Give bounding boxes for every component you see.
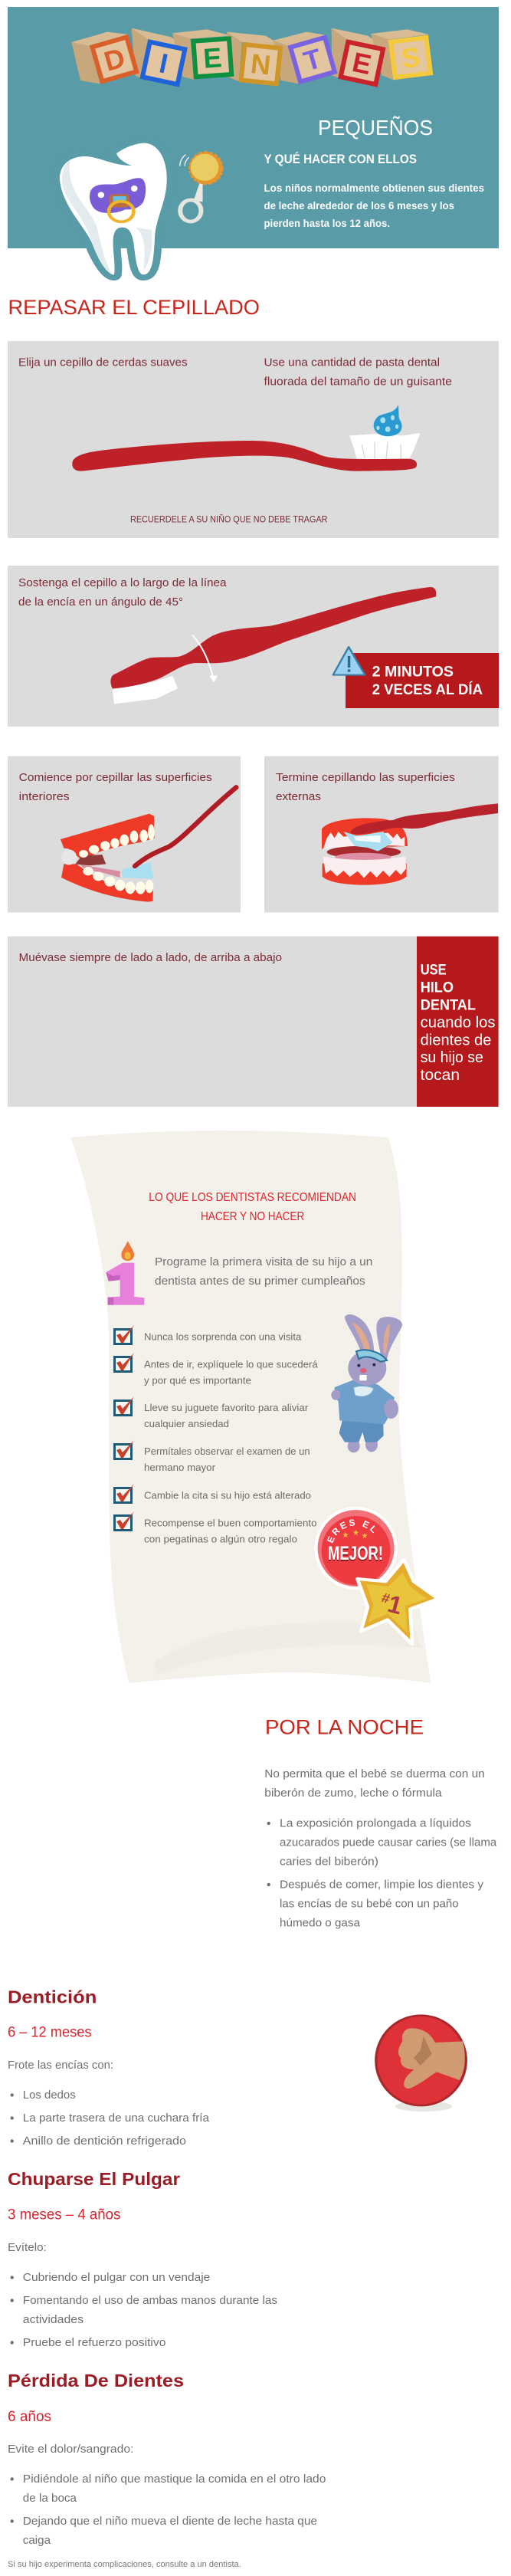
list: pulgar: Fomentando el uso de ambas manos durante las [23, 2294, 277, 2307]
text: biberon: biberón de zumo, leche o fórmula [264, 1787, 442, 1800]
badge: eres el mejor: ★ [362, 1532, 369, 1541]
title: DIENTES letter blocks [71, 28, 431, 84]
hero text: Los niños normalmente obtienen sus dientes [264, 182, 484, 194]
icon: candle number one [106, 1241, 144, 1305]
check item 5 [115, 1484, 311, 1502]
list: denticion: Los dedos [23, 2089, 76, 2102]
text: muevase: Muévase siempre de lado a lado, de arriba a abajo [18, 951, 282, 964]
callout: 2 minutos: 2 VECES AL DÍA [372, 681, 483, 698]
icon: rattle [180, 153, 222, 222]
list: noche: húmedo o gasa [280, 1916, 361, 1929]
panel: angled brush [8, 566, 499, 727]
list: noche [267, 1816, 497, 1929]
icon: tooth with pacifier [60, 143, 167, 274]
text: 45 grados [18, 576, 227, 609]
hero heading: PEQUEÑOS [318, 116, 433, 139]
panel: hero [8, 7, 499, 274]
heading: recomiendan: LO QUE LOS DENTISTAS RECOMIENDAN [149, 1191, 356, 1204]
title: DIENTES letter blocks: I [156, 47, 171, 80]
section: chuparse el pulgar [8, 2169, 277, 2349]
check item 2: Antes de ir, explíquele lo que sucederá [144, 1358, 318, 1370]
check item 3 [115, 1396, 309, 1429]
title: DIENTES letter blocks: E [202, 41, 223, 74]
section: por la noche [264, 1716, 497, 1929]
text: evite: Evite el dolor/sangrado: [8, 2443, 133, 2456]
heading: recomiendan: HACER Y NO HACER [201, 1210, 304, 1223]
list: denticion: La parte trasera de una cuchara fría [23, 2112, 210, 2125]
list: denticion [11, 2089, 210, 2148]
callout: hilo dental: su hijo se [421, 1049, 483, 1066]
list: perdida: Dejando que el niño mueva el diente de leche hasta que [23, 2515, 317, 2528]
heading: denticion: Dentición [8, 1987, 97, 2007]
check item 2: y por qué es importante [144, 1374, 251, 1386]
icon: bunny dentist [331, 1314, 402, 1452]
badge: eres el mejor: ERES EL [326, 1519, 375, 1544]
badge: eres el mejor [314, 1507, 397, 1590]
panel: exterior surfaces [264, 756, 499, 912]
text: 45 grados: Sostenga el cepillo a lo largo de la línea [18, 576, 227, 589]
badge: eres el mejor: ★ [352, 1529, 359, 1537]
callout: 2 minutos: 2 MINUTOS [372, 664, 454, 681]
text: primera visita [155, 1255, 372, 1288]
panel: interior surfaces [8, 756, 241, 912]
panel: soft brush and paste [8, 341, 499, 538]
icon: angled toothbrush [110, 587, 436, 704]
icon: thumbs down coin [376, 2016, 466, 2112]
section: perdida de dientes [8, 2371, 326, 2569]
hero subheading: Y QUÉ HACER CON ELLOS [264, 152, 417, 166]
panel: side to side and floss [8, 937, 499, 1107]
heading: chuparse el pulgar: Chuparse El Pulgar [8, 2169, 180, 2189]
text: evitelo: Evítelo: [8, 2241, 47, 2254]
text: elija cepillo: Elija un cepillo de cerdas suaves [18, 356, 188, 369]
heading: perdida de dientes: Pérdida De Dientes [8, 2371, 184, 2391]
check item 6 [115, 1511, 317, 1544]
list: perdida [11, 2473, 326, 2547]
title: DIENTES letter blocks: N [249, 48, 272, 81]
callout: hilo dental: cuando los [421, 1015, 495, 1032]
age: 6 anos: 6 años [8, 2409, 51, 2425]
badge: star number one: # [380, 1590, 391, 1606]
text: 45 grados: de la encía en un ángulo de 45° [18, 596, 183, 609]
text: biberon: No permita que el bebé se duerma con un [264, 1767, 485, 1780]
age: 6 a 12 meses: 6 – 12 meses [8, 2025, 92, 2041]
heading: por la noche: POR LA NOCHE [265, 1716, 424, 1739]
check item 2 [115, 1353, 318, 1386]
list: noche: La exposición prolongada a líquidos [280, 1816, 471, 1829]
text: primera visita: dentista antes de su primer cumpleaños [155, 1275, 365, 1288]
icon: warning triangle [333, 647, 365, 675]
callout: hilo dental: tocan [421, 1067, 460, 1084]
title: DIENTES letter blocks: T [300, 42, 325, 77]
badge: eres el mejor: ★ [342, 1531, 349, 1540]
list: noche: las encías de su bebé con un paño [280, 1897, 459, 1910]
age: 3 meses a 4 anos: 3 meses – 4 años [8, 2207, 120, 2223]
check item 3: cualquier ansiedad [144, 1418, 229, 1429]
text: pasta dental: Use una cantidad de pasta dental [264, 356, 440, 369]
list: pulgar: Cubriendo el pulgar con un vendaje [23, 2271, 210, 2284]
check item 5: Cambie la cita si su hijo está alterado [144, 1489, 311, 1501]
note: no tragar: RECUERDELE A SU NIÑO QUE NO DEBE TRAGAR [130, 515, 328, 525]
callout: hilo dental: USE [421, 962, 447, 979]
paper background [70, 1130, 431, 1683]
badge: star number one [357, 1560, 438, 1644]
list: denticion: Anillo de dentición refrigerado [23, 2135, 186, 2148]
heading: recomiendan [149, 1191, 356, 1223]
icon: open dentures with brush [61, 787, 236, 902]
list: pulgar: Pruebe el refuerzo positivo [23, 2336, 165, 2349]
section: denticion [8, 1987, 210, 2148]
list: pulgar [11, 2271, 277, 2349]
title: DIENTES letter blocks: E [349, 46, 374, 80]
text: superficies externas [276, 771, 455, 803]
icon: toothbrush with paste [72, 405, 421, 471]
footnote: Si su hijo experimenta complicaciones, consulte a un dentista. [8, 2560, 241, 2569]
badge: eres el mejor: MEJOR! [328, 1543, 383, 1564]
heading: repasar el cepillado: REPASAR EL CEPILLADO [8, 296, 260, 319]
hero text [264, 182, 484, 229]
check item 3: Lleve su juguete favorito para aliviar [144, 1402, 309, 1413]
text: frote: Frote las encías con: [8, 2059, 113, 2072]
text: superficies interiores [19, 771, 212, 803]
badge: star number one: 1 [385, 1590, 405, 1619]
check item 4: hermano mayor [144, 1462, 216, 1473]
list: noche: azucarados puede causar caries (se llama [280, 1836, 497, 1849]
callout: 2 minutos [333, 647, 499, 708]
list: pulgar: actividades [23, 2313, 84, 2326]
check item 4: Permítales observar el examen de un [144, 1446, 310, 1457]
check item 4 [115, 1440, 310, 1473]
check item 6: con pegatinas o algún otro regalo [144, 1533, 297, 1544]
text: superficies externas: Termine cepillando las superficies [276, 771, 455, 784]
title: DIENTES letter blocks: D [100, 41, 129, 77]
callout: hilo dental: dientes de [421, 1032, 491, 1048]
callout: hilo dental [417, 937, 498, 1107]
text: pasta dental: fluorada del tamaño de un guisante [264, 376, 452, 389]
list: perdida: de la boca [23, 2492, 77, 2505]
list: perdida: caiga [23, 2534, 51, 2547]
check item 6: Recompense el buen comportamiento [144, 1517, 317, 1528]
list: noche: Después de comer, limpie los dientes y [280, 1878, 483, 1891]
icon: closed dentures with brush [322, 803, 498, 885]
text: superficies interiores: Comience por cepillar las superficies [19, 771, 212, 784]
hero text: pierden hasta los 12 años. [264, 218, 390, 229]
list: perdida: Pidiéndole al niño que mastique la comida en el otro lado [23, 2473, 326, 2486]
check item 1: Nunca los sorprenda con una visita [144, 1331, 302, 1342]
hero text: de leche alrededor de los 6 meses y los [264, 200, 454, 212]
hero background [8, 7, 499, 248]
callout: hilo dental: DENTAL [421, 996, 476, 1013]
text: primera visita: Programe la primera visita de su hijo a un [155, 1255, 372, 1268]
list: noche: caries del biberón) [280, 1855, 378, 1868]
check item 1 [115, 1325, 302, 1344]
text: biberon [264, 1767, 485, 1800]
title: DIENTES letter blocks: S [400, 41, 421, 74]
checklist [115, 1325, 318, 1544]
text: superficies interiores: interiores [19, 790, 70, 803]
text: pasta dental [264, 356, 452, 389]
text: superficies externas: externas [276, 790, 321, 803]
panel: dentist recommendations paper [70, 1130, 435, 1683]
callout: hilo dental: HILO [421, 979, 454, 996]
